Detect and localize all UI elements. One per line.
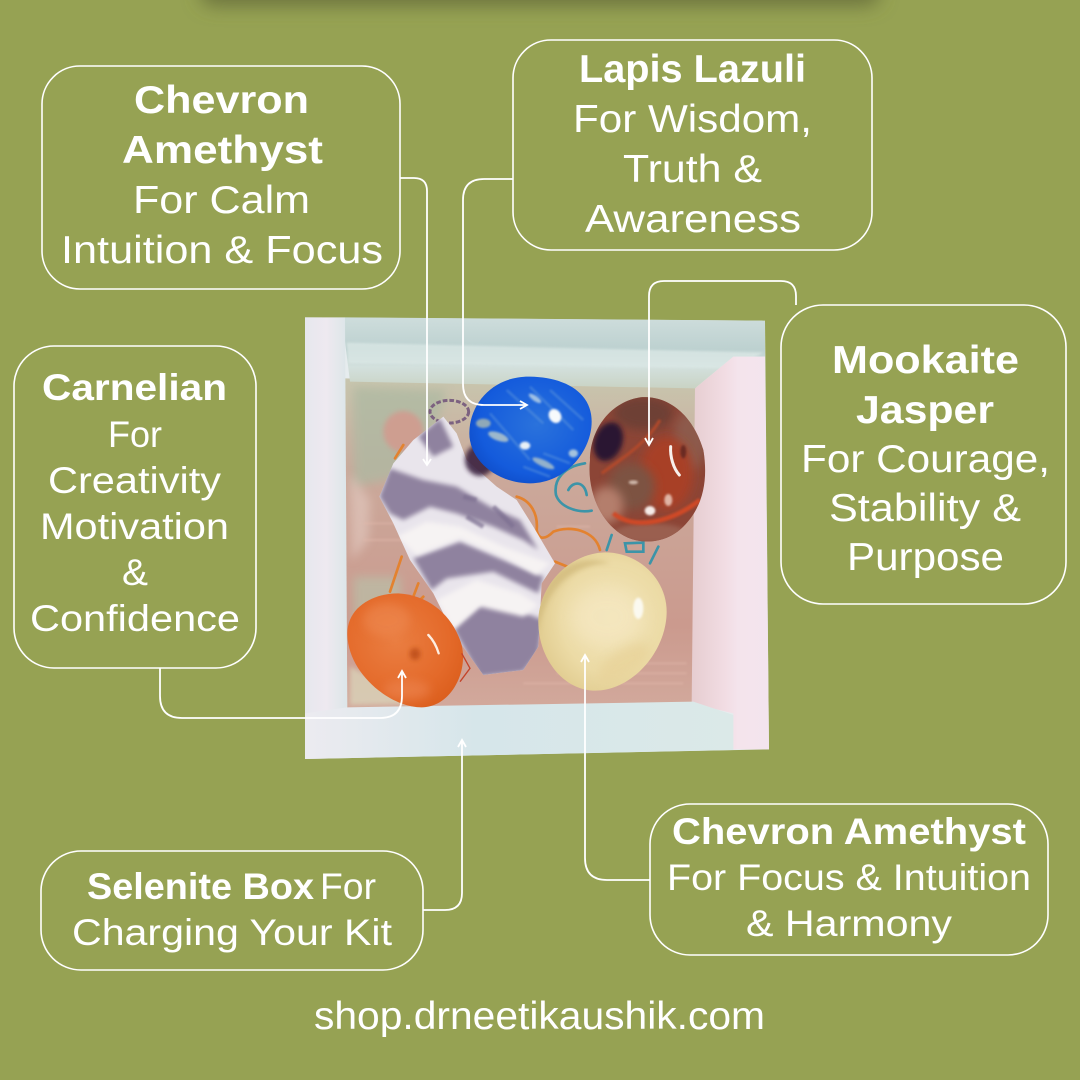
heading: carnelian: Carnelian: [42, 367, 227, 408]
text: creativity motivation confidence: Confidence: [30, 598, 240, 639]
orange string decoration: [390, 445, 600, 600]
website url: shop.drneetikaushik.com: [314, 995, 765, 1038]
stone: chevron amethyst rough: [379, 417, 555, 677]
text: wisdom truth awareness: Truth &: [623, 148, 762, 191]
connector arrow: mookaite jasper: [645, 281, 796, 445]
text: focus intuition harmony: For Focus & Intuition: [667, 857, 1031, 898]
panel: selenite box: [41, 851, 423, 970]
box bottom wall: [305, 702, 733, 759]
heading: mookaite jasper: [832, 339, 1019, 432]
heading: chevron amethyst: [122, 79, 323, 172]
crown mandala string: [430, 400, 469, 423]
text: focus intuition harmony: & Harmony: [746, 903, 953, 944]
connector arrow: selenite box: [423, 740, 466, 910]
box floor: [345, 378, 698, 708]
text: wisdom truth awareness: Awareness: [585, 198, 801, 241]
box top wall: [345, 317, 765, 388]
panel: carnelian: [14, 346, 256, 668]
panel: mookaite jasper: [781, 305, 1066, 604]
text: calm intuition focus: For Calm: [133, 179, 310, 222]
connector arrow: carnelian: [160, 668, 406, 718]
heading: lapis lazuli: Lapis Lazuli: [579, 48, 806, 91]
connector arrow: lapis lazuli: [463, 179, 527, 409]
heading: chevron amethyst: Chevron Amethyst: [672, 811, 1026, 852]
box right wall: [692, 357, 769, 749]
text: creativity motivation confidence: For: [108, 414, 162, 455]
stone: mookaite jasper: [588, 397, 707, 543]
text: wisdom truth awareness: For Wisdom,: [573, 98, 812, 141]
panel: lapis lazuli: [513, 40, 872, 250]
connector arrow: chevron amethyst: [400, 178, 431, 465]
teal string decoration: [556, 463, 658, 563]
heading: chevron amethyst: Amethyst: [122, 129, 323, 172]
text: creativity motivation confidence: Creativity: [48, 460, 222, 501]
shadow under lapis: [465, 444, 495, 476]
text: selenite box charging: Charging Your Kit: [72, 912, 393, 953]
box left wall: [305, 317, 347, 717]
heading: mookaite jasper: Mookaite: [832, 339, 1019, 382]
stone: carnelian: [347, 593, 470, 707]
text: calm intuition focus: Intuition & Focus: [61, 229, 383, 272]
top shadow strip: [200, 0, 880, 6]
text: selenite box charging: [72, 866, 393, 953]
text: courage stability purpose: [801, 438, 1050, 579]
text: courage stability purpose: For Courage,: [801, 438, 1050, 481]
text: selenite box charging: For: [320, 866, 376, 907]
crystal photo group: [305, 317, 769, 759]
stone: lapis lazuli: [469, 377, 592, 483]
text: creativity motivation confidence: Motivation: [40, 506, 229, 547]
text: courage stability purpose: Purpose: [847, 536, 1004, 579]
connector arrow: yellow stone: [581, 655, 650, 880]
text: creativity motivation confidence: &: [122, 552, 148, 593]
panel: chevron amethyst focus: [650, 804, 1048, 955]
text: calm intuition focus: [61, 179, 383, 272]
panel: chevron amethyst calm: [42, 66, 400, 289]
text: courage stability purpose: Stability &: [829, 487, 1021, 530]
heading: mookaite jasper: Jasper: [856, 389, 994, 432]
heading: chevron amethyst: Chevron: [134, 79, 309, 122]
text: focus intuition harmony: [667, 857, 1031, 944]
text: selenite box charging: Selenite Box: [87, 866, 314, 907]
stone: yellow calcite: [535, 552, 667, 691]
text: creativity motivation confidence: [30, 414, 240, 639]
text: wisdom truth awareness: [573, 98, 812, 241]
selenite box: [305, 317, 769, 759]
